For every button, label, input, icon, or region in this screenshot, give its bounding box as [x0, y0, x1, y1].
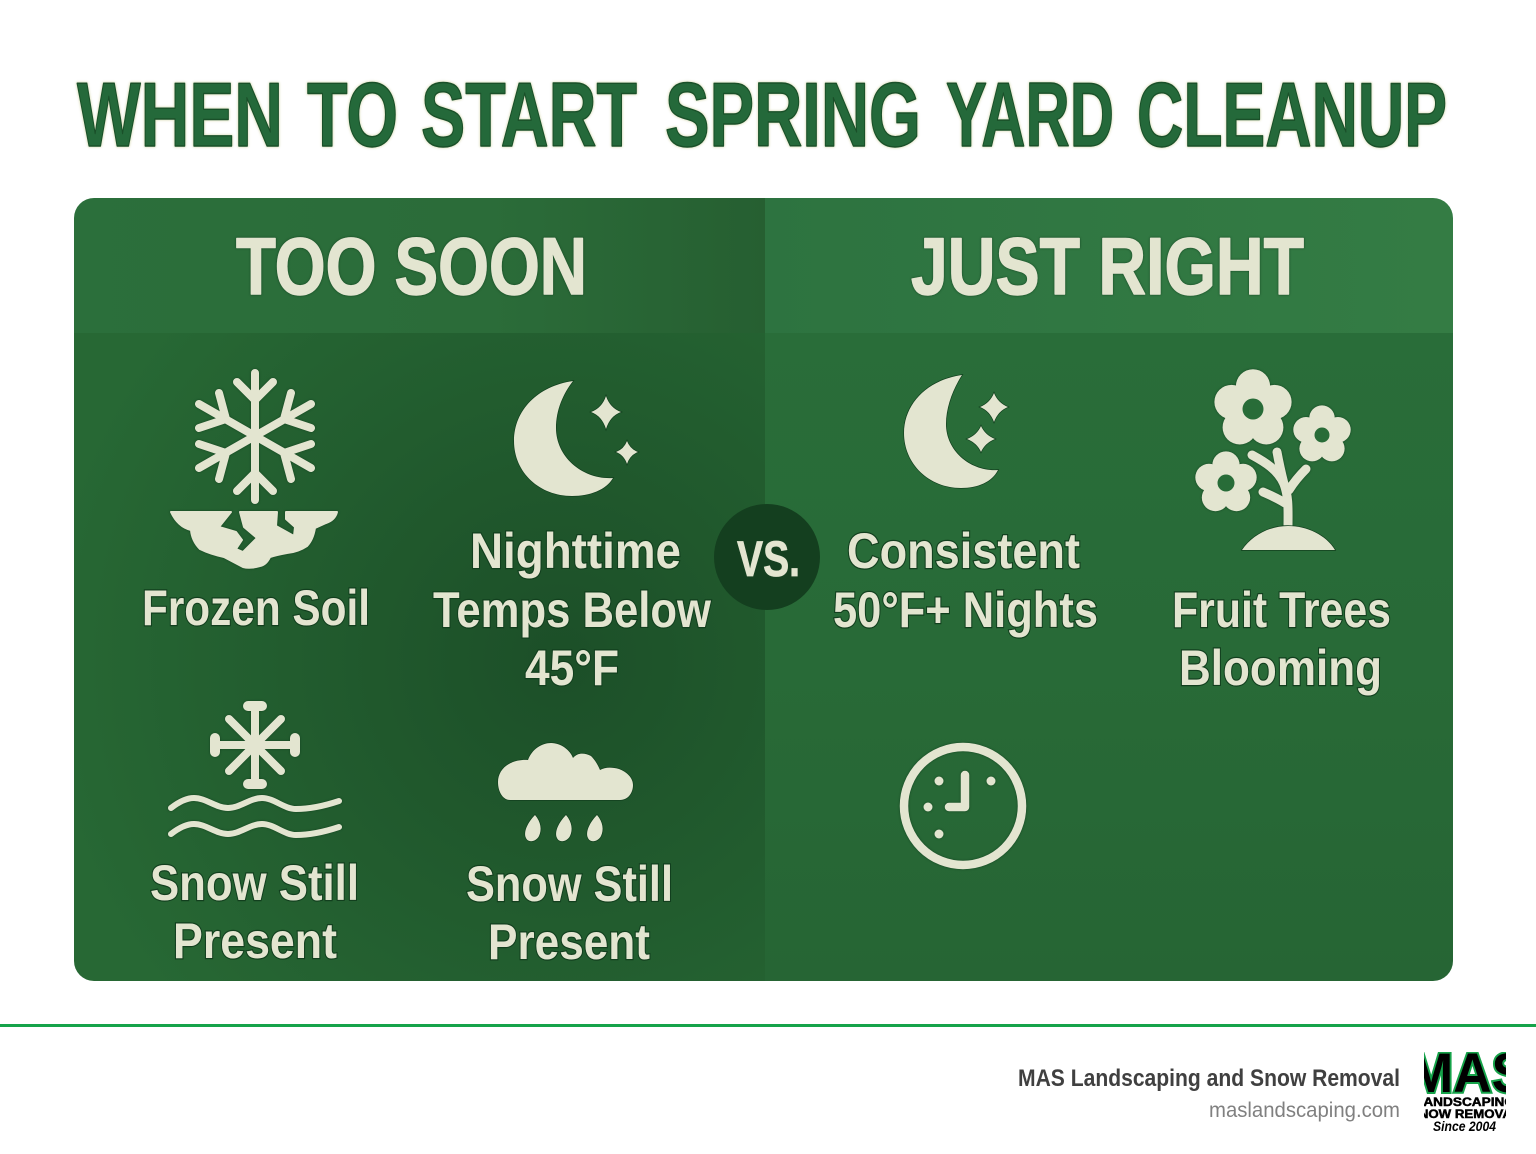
- title: [77, 65, 1447, 166]
- comparison panel: [74, 198, 1453, 981]
- title: SPRING: [665, 65, 921, 166]
- label: snow still present, left: [150, 855, 359, 969]
- logo: [1424, 1052, 1506, 1131]
- icon: cloud and rain: [498, 743, 633, 841]
- footer: company name: MAS Landscaping and Snow Removal: [1018, 1065, 1400, 1092]
- label: snow still present, right: [466, 856, 673, 970]
- label: snow still present, left: Snow Still: [150, 855, 359, 911]
- icon: moon and stars, too soon: [514, 381, 638, 496]
- logo: SNOW REMOVAL: [1410, 1107, 1520, 1121]
- heading: just right: JUST RIGHT: [911, 222, 1304, 312]
- title: WHEN: [77, 65, 283, 166]
- label: nighttime temps below 45°F: Nighttime: [470, 523, 681, 579]
- label: snow still present, left: Present: [173, 913, 337, 969]
- label: fruit trees blooming: [1172, 582, 1391, 696]
- icon: snowflake over frozen soil: [171, 373, 337, 568]
- label: snow still present, right: Present: [488, 914, 650, 970]
- label: consistent 50°F+ nights: [833, 523, 1098, 638]
- title: START: [421, 65, 637, 166]
- vs badge: [714, 504, 820, 610]
- icon: moon and stars, just right: [904, 375, 1008, 488]
- label: consistent 50°F+ nights: Consistent: [847, 523, 1080, 579]
- title: YARD: [946, 65, 1114, 166]
- icon: blooming fruit tree: [1195, 369, 1351, 550]
- icon: snow crystal over waves: [171, 706, 339, 835]
- logo: MAS: [1409, 1041, 1527, 1104]
- label: consistent 50°F+ nights: 50°F+ Nights: [833, 582, 1098, 638]
- logo: LANDSCAPING: [1415, 1095, 1515, 1109]
- label: fruit trees blooming: Fruit Trees: [1172, 582, 1391, 638]
- heading: too soon: TOO SOON: [236, 222, 587, 312]
- footer divider: [0, 1024, 1536, 1027]
- logo: Since 2004: [1433, 1118, 1496, 1134]
- label: snow still present, right: Snow Still: [466, 856, 673, 912]
- label: fruit trees blooming: Blooming: [1179, 640, 1382, 696]
- footer: website: maslandscaping.com: [1209, 1099, 1400, 1122]
- icon: clock: [904, 747, 1022, 865]
- title: TO: [307, 65, 398, 166]
- label: nighttime temps below 45°F: 45°F: [525, 640, 619, 696]
- label: nighttime temps below 45°F: [433, 523, 711, 696]
- vs badge: VS.: [737, 531, 800, 587]
- label: nighttime temps below 45°F: Temps Below: [433, 582, 711, 638]
- label: frozen soil: Frozen Soil: [142, 580, 370, 636]
